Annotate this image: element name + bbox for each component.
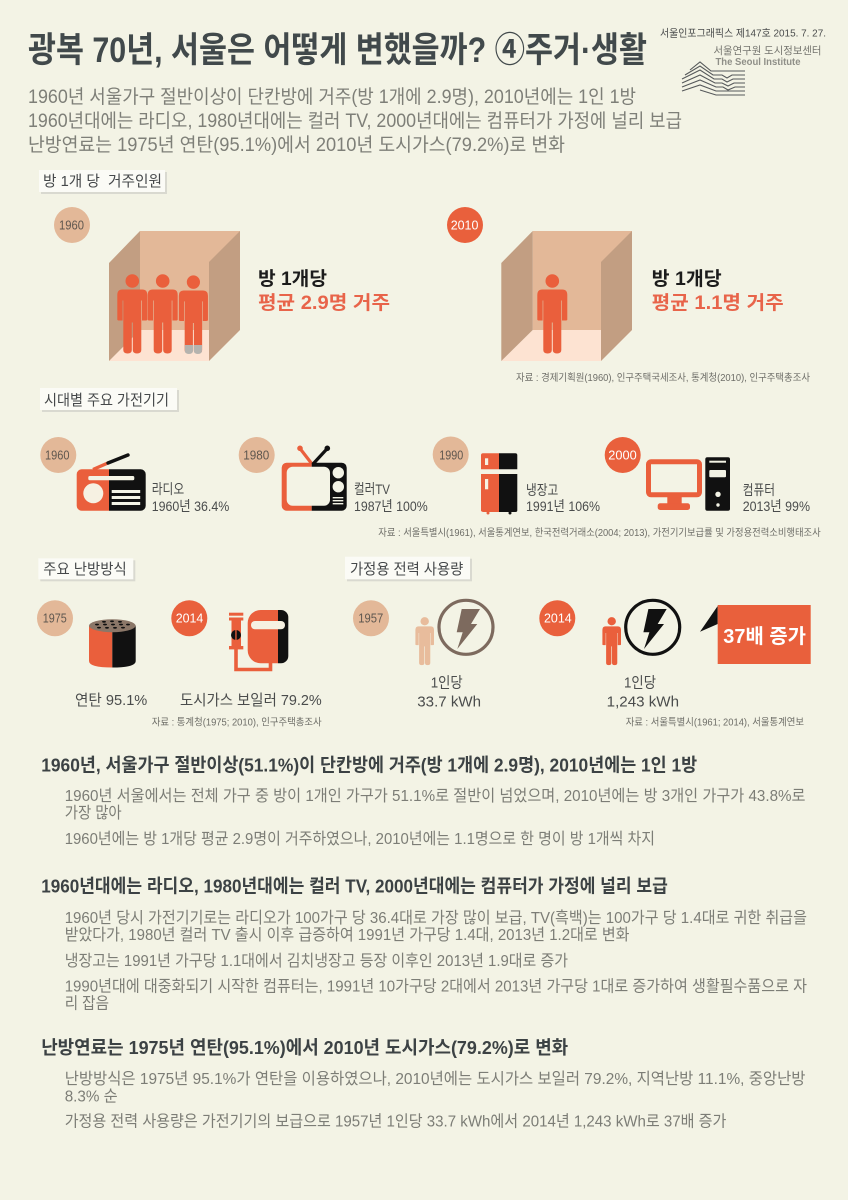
icon: radio: [77, 455, 146, 511]
year badge 1990: [433, 436, 469, 472]
year badge 1980: [239, 437, 275, 473]
text block: appliances: [41, 876, 807, 1012]
year badge 2000: 2000: [608, 448, 637, 462]
section label: persons per room: 방 1개 당 거주인원: [43, 173, 162, 190]
text block: heating fuel: 가정용 전력 사용량은 가전기기의 보급으로 1957년 1인당 33.7 kWh에서 2014년 1,243 kWh로 37배 증가: [65, 1112, 727, 1130]
caption 1960: 평균 2.9명 거주: [258, 292, 390, 314]
icon: coal briquette: [89, 619, 136, 668]
text block: housing: 1960년에는 방 1개당 평균 2.9명이 거주하였으나, 2010년에는 1.1명으로 한 명이 방 1개씩 차지: [65, 830, 655, 848]
publication info: 서울인포그래픽스 제147호 2015. 7. 27.: [660, 28, 826, 40]
caption 1957: [417, 674, 481, 711]
year badge 1960: 1960: [59, 218, 84, 232]
year badge 1960: 1960: [45, 448, 70, 462]
heading: housing: 1960년, 서울가구 절반이상(51.1%)이 단칸방에 거주(방 1개에 2.9명), 2010년에는 1인 1방: [41, 754, 697, 776]
panel: heating methods: [37, 558, 322, 728]
year badge 2014: 2014: [544, 611, 572, 626]
callout: 37x increase: 37배 증가: [723, 625, 806, 648]
caption 1960: 방 1개당: [258, 268, 327, 290]
caption 2014: [607, 674, 679, 711]
caption 1957: 1인당: [431, 674, 463, 691]
text block: housing: 가장 많아: [65, 804, 122, 822]
text block: heating fuel: 난방방식은 1975년 95.1%가 연탄을 이용하였으나, 2010년에는 도시가스 보일러 79.2%, 지역난방 11.1%, 중앙난방: [65, 1070, 806, 1088]
caption 2010: 평균 1.1명 거주: [652, 292, 784, 314]
source note: 자료 : 서울특별시(1961), 서울통계연보, 한국전력거래소(2004; 2013), 가전기기보급률 및 가정용전력소비행태조사: [378, 527, 821, 539]
panel: appliances by era: [40, 388, 821, 539]
summary lines: [28, 86, 682, 156]
text block: appliances: 리 잡음: [65, 994, 109, 1012]
source note: 자료 : 서울특별시(1961; 2014), 서울통계연보: [626, 716, 804, 728]
panel: household electricity: [345, 557, 811, 728]
year badge 2000: [605, 437, 641, 473]
refrigerator caption: 냉장고: [526, 482, 558, 498]
caption 2014: 1,243 kWh: [607, 694, 679, 711]
publisher block with logo: [682, 45, 822, 95]
caption 2010: 방 1개당: [652, 268, 722, 290]
year badge 2010: 2010: [451, 218, 478, 232]
section label: persons per room: [39, 170, 167, 194]
icon: person and bolt 2014: [602, 600, 680, 665]
refrigerator caption: [526, 482, 600, 514]
year badge 1990: 1990: [439, 447, 463, 462]
year badge 2014: [171, 600, 207, 636]
radio caption: [152, 481, 229, 514]
text block: housing: 1960년 서울에서는 전체 가구 중 방이 1개인 가구가 51.1%로 절반이 넘었으며, 2010년에는 방 3개인 가구가 43.8%로: [65, 787, 805, 805]
radio caption: 라디오: [152, 481, 184, 497]
title: 광복 70년, 서울은 어떻게 변했을까? ④주거·생활: [28, 31, 647, 70]
heading: appliances: 1960년대에는 라디오, 1980년대에는 컬러 TV, 2000년대에는 컴퓨터가 가정에 널리 보급: [41, 876, 668, 896]
icon: gas boiler: [229, 610, 288, 670]
boiler caption: 도시가스 보일러 79.2%: [180, 692, 322, 709]
refrigerator caption: 1991년 106%: [526, 498, 600, 514]
year badge 1980: 1980: [243, 448, 269, 462]
year badge 1975: [37, 600, 73, 636]
summary lines: 1960년 서울가구 절반이상이 단칸방에 거주(방 1개에 2.9명), 2010년에는 1인 1방: [28, 86, 636, 108]
icon: person and bolt 1957: [415, 600, 493, 665]
briquette caption: 연탄 95.1%: [75, 692, 147, 709]
summary lines: 난방연료는 1975년 연탄(95.1%)에서 2010년 도시가스(79.2%)로 변화: [28, 134, 565, 156]
caption 2010: [652, 268, 784, 314]
computer caption: 2013년 99%: [743, 498, 810, 514]
source note: 자료 : 통계청(1975; 2010), 인구주택총조사: [152, 716, 322, 728]
callout: 37x increase: [700, 605, 811, 664]
caption 1957: 33.7 kWh: [417, 694, 481, 711]
tv caption: [354, 481, 428, 514]
section label: heating: [38, 558, 135, 581]
publisher name: 서울연구원 도시정보센터: [714, 45, 822, 57]
text block: heating fuel: 8.3% 순: [65, 1088, 118, 1106]
section label: appliances: 시대별 주요 가전기기: [44, 392, 169, 409]
year badge 2014: [539, 600, 575, 636]
icon: refrigerator: [481, 453, 517, 514]
year badge 2010: [447, 207, 483, 243]
text block: appliances: 1960년 당시 가전기기로는 라디오가 100가구 당 36.4대로 가장 많이 보급, TV(흑백)는 100가구 당 1.4대로 귀한 취급을: [65, 909, 807, 927]
year badge 1960: [40, 437, 76, 473]
icon: computer: [648, 457, 730, 511]
year badge 1957: [353, 600, 389, 636]
text block: appliances: 1990년대에 대중화되기 시작한 컴퓨터는, 1991년 10가구당 2대에서 2013년 가구당 1대로 증가하여 생활필수품으로 자: [65, 978, 807, 996]
source note: 자료 : 경제기획원(1960), 인구주택국세조사, 통계청(2010), 인구주택총조사: [516, 371, 810, 384]
radio caption: 1960년 36.4%: [152, 498, 229, 514]
year badge 1975: 1975: [43, 611, 67, 626]
caption 2014: 1인당: [624, 674, 656, 691]
tv caption: 컬러TV: [354, 481, 391, 497]
section label: heating: 주요 난방방식: [43, 561, 127, 578]
section label: appliances: [40, 388, 179, 412]
room 2010 with one person: [501, 231, 632, 361]
tv caption: 1987년 100%: [354, 498, 428, 514]
heading: heating fuel: 난방연료는 1975년 연탄(95.1%)에서 2010년 도시가스(79.2%)로 변화: [41, 1037, 568, 1058]
text block: appliances: 냉장고는 1991년 가구당 1.1대에서 김치냉장고 등장 이후인 2013년 1.9대로 증가: [65, 952, 568, 970]
icon: seoul institute logo: [682, 62, 745, 95]
panel: persons per room: [39, 170, 810, 384]
summary lines: 1960년대에는 라디오, 1980년대에는 컬러 TV, 2000년대에는 컴퓨터가 가정에 널리 보급: [28, 110, 682, 132]
text block: appliances: 받았다가, 1980년 컬러 TV 출시 이후 급증하여 1991년 가구당 1.4대, 2013년 1.2대로 변화: [65, 926, 630, 944]
section label: electricity: [345, 557, 472, 581]
computer caption: [743, 482, 810, 514]
caption 1960: [258, 268, 390, 314]
text block: housing: [41, 754, 805, 848]
icon: colour tv: [282, 446, 347, 511]
section label: electricity: 가정용 전력 사용량: [350, 561, 463, 578]
publisher english name: The Seoul Institute: [716, 57, 801, 68]
room 1960 with three people: [109, 231, 240, 361]
year badge 1960: [54, 207, 90, 243]
computer caption: 컴퓨터: [743, 482, 775, 498]
year badge 1957: 1957: [358, 611, 383, 626]
year badge 2014: 2014: [176, 611, 203, 626]
text block: heating fuel: [41, 1037, 806, 1130]
